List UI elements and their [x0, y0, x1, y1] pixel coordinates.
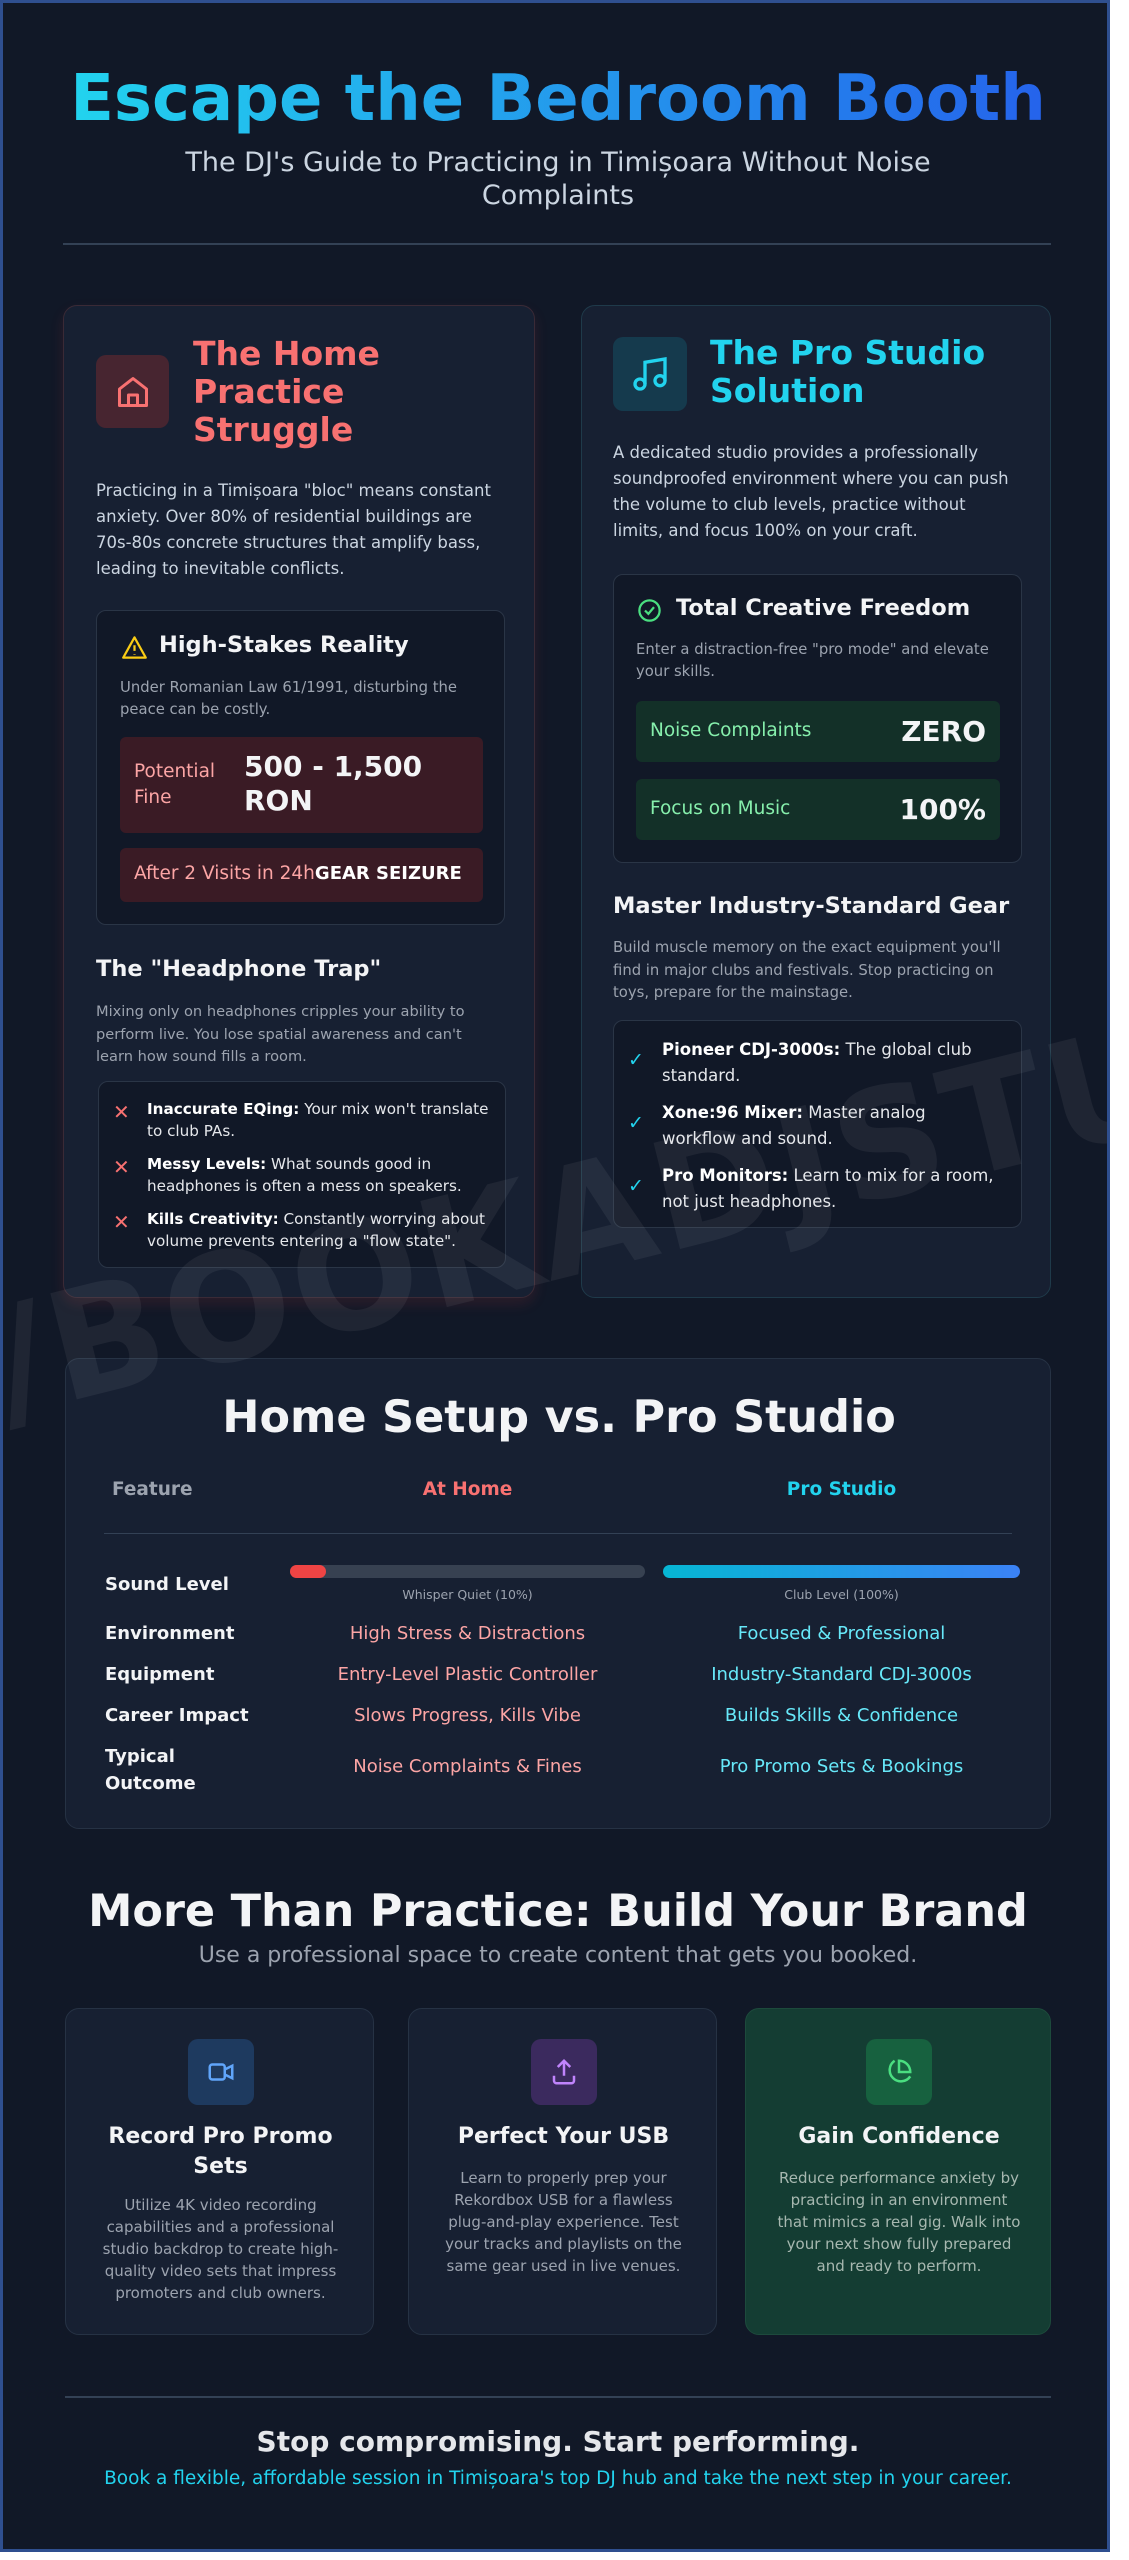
footer text: Book a flexible, affordable session in Timișoara's top DJ hub and take the next step in your career.: [104, 2468, 1012, 2489]
footer heading: Stop compromising. Start performing.: [257, 2425, 859, 2458]
row: sound level: Sound Level: [105, 1574, 229, 1595]
table header: Pro Studio: [787, 1479, 896, 1500]
text: law: Under Romanian Law 61/1991, disturbing the peace can be costly.: [120, 679, 457, 718]
heading: home practice struggle: The Home Practice Struggle: [193, 334, 380, 449]
table header: Feature: [112, 1479, 193, 1500]
gear seizure box: [120, 848, 483, 902]
heading: comparison: Home Setup vs. Pro Studio: [222, 1392, 896, 1443]
row: sound level: Whisper Quiet (10%): [402, 1587, 533, 1602]
stat: noise complaints: Noise Complaints: [650, 720, 811, 741]
list: gear: [613, 1020, 1022, 1228]
list: gear: Pioneer CDJ-3000s: The global club standard.: [662, 1040, 972, 1085]
panel: comparison: Outcome: [105, 1773, 196, 1794]
row: sound level: Club Level (100%): [784, 1587, 899, 1602]
card: record promo sets: Utilize 4K video recording capabilities and a professional studio backdrop to create high-quality video sets that impress promoters and club owners.: [103, 2196, 338, 2302]
list: gear: Pro Monitors: Learn to mix for a room, not just headphones.: [662, 1166, 994, 1211]
text: headphone trap: Mixing only on headphones cripples your ability to perform live. You lose spatial awareness and can't learn how sound fills a room.: [96, 1003, 465, 1065]
fine box: Fine: [134, 787, 172, 808]
box: high-stakes reality: [96, 610, 505, 925]
list: gear: ✓: [628, 1112, 644, 1134]
heading: headphone trap: The "Headphone Trap": [96, 956, 381, 982]
fine box: RON: [244, 784, 313, 817]
icon: pie chart: [866, 2039, 932, 2105]
rows: [105, 1623, 972, 1794]
panel: pro studio solution: [581, 305, 1051, 1298]
heading: build your brand: More Than Practice: Build Your Brand: [88, 1886, 1028, 1937]
rows: Builds Skills & Confidence: [725, 1705, 958, 1726]
rows: Environment: [105, 1623, 234, 1644]
fine box: [120, 737, 483, 833]
card: gain confidence: Gain Confidence: [798, 2124, 1000, 2149]
icon: warning: [122, 636, 147, 659]
stat: focus: [636, 779, 1000, 840]
list: headphone problems: Messy Levels: What sounds good in headphones is often a mess on speakers.: [147, 1155, 462, 1195]
rows: Equipment: [105, 1664, 214, 1685]
rows: Industry-Standard CDJ-3000s: [711, 1664, 972, 1685]
rows: Typical: [105, 1746, 175, 1767]
card: perfect your usb: Learn to properly prep your Rekordbox USB for a flawless plug-and-play experience. Test your tracks and playlists on the same gear used in live venues.: [445, 2169, 682, 2275]
rows: High Stress & Distractions: [350, 1623, 585, 1644]
panel: home practice struggle: [63, 305, 535, 1298]
list: gear: ✓: [628, 1049, 644, 1071]
icon: music note: [613, 337, 687, 411]
text: intro: A dedicated studio provides a professionally soundproofed environment where you can push the volume to club levels, practice without limits, and focus 100% on your craft.: [613, 443, 1009, 540]
subtitle: brand: Use a professional space to create content that gets you booked.: [199, 1943, 917, 1968]
card: perfect your usb: Perfect Your USB: [458, 2124, 669, 2149]
stat: focus: Focus on Music: [650, 798, 790, 819]
stat: noise complaints: ZERO: [901, 715, 986, 748]
heading: master gear: Master Industry-Standard Gear: [613, 893, 1009, 919]
icon: house: [96, 355, 169, 428]
title: Escape the Bedroom Booth: [70, 62, 1046, 136]
row: sound level: [105, 1565, 1020, 1602]
rows: Slows Progress, Kills Vibe: [354, 1705, 581, 1726]
stat: focus: 100%: [899, 793, 986, 826]
text: gear: Build muscle memory on the exact equipment you'll find in major clubs and festivals. Stop practicing on toys, prepare for the mainstage.: [613, 939, 1001, 1001]
rows: Career Impact: [105, 1705, 249, 1726]
fine box: Potential: [134, 761, 215, 782]
stat: noise complaints: [636, 701, 1000, 762]
bar: at home: [290, 1565, 645, 1578]
list: gear: ✓: [628, 1175, 644, 1197]
rows: Focused & Professional: [738, 1623, 945, 1644]
list: headphone problems: Inaccurate EQing: Your mix won't translate to club PAs.: [147, 1100, 488, 1140]
card: perfect your usb: [408, 2008, 717, 2335]
panel: comparison: [65, 1358, 1051, 1829]
list: headphone problems: Kills Creativity: Constantly worrying about volume prevents entering a "flow state".: [147, 1210, 485, 1250]
text: intro: Practicing in a Timișoara "bloc" means constant anxiety. Over 80% of residential buildings are 70s-80s concrete structures that amplify bass, leading to inevitable conflicts.: [96, 481, 491, 578]
heading: pro studio solution: The Pro Studio Solution: [710, 333, 985, 410]
icon: check circle: [638, 599, 661, 622]
card: record promo sets: Record Pro Promo Sets: [108, 2124, 333, 2179]
rows: Pro Promo Sets & Bookings: [720, 1756, 963, 1777]
gear seizure box: After 2 Visits in 24hGEAR SEIZURE: [134, 863, 462, 884]
heading: high-stakes: High-Stakes Reality: [159, 632, 409, 658]
subtitle: The DJ's Guide to Practicing in Timișoara Without Noise Complaints: [185, 147, 931, 211]
bar: pro studio: [663, 1565, 1020, 1578]
card: record promo sets: [65, 2008, 374, 2335]
list: gear: Xone:96 Mixer: Master analog workflow and sound.: [662, 1103, 926, 1148]
table header: At Home: [423, 1479, 512, 1500]
rows: Entry-Level Plastic Controller: [338, 1664, 597, 1685]
card: gain confidence: [745, 2008, 1051, 2335]
card: gain confidence: Reduce performance anxiety by practicing in an environment that mimics a real gig. Walk into your next show fully prepared and ready to perform.: [778, 2169, 1020, 2275]
fine box: 500 - 1,500: [244, 750, 422, 783]
rows: Noise Complaints & Fines: [353, 1756, 582, 1777]
list: headphone problems: ✕: [113, 1100, 130, 1124]
list: headphone problems: [98, 1081, 506, 1268]
table header: [112, 1479, 896, 1500]
list: headphone problems: ✕: [113, 1155, 130, 1179]
icon: upload: [531, 2039, 597, 2105]
icon: video: [188, 2039, 254, 2105]
list: headphone problems: ✕: [113, 1210, 130, 1234]
heading: freedom: Total Creative Freedom: [676, 595, 970, 621]
box: total creative freedom: [613, 574, 1022, 863]
text: freedom: Enter a distraction-free "pro mode" and elevate your skills.: [636, 641, 989, 680]
